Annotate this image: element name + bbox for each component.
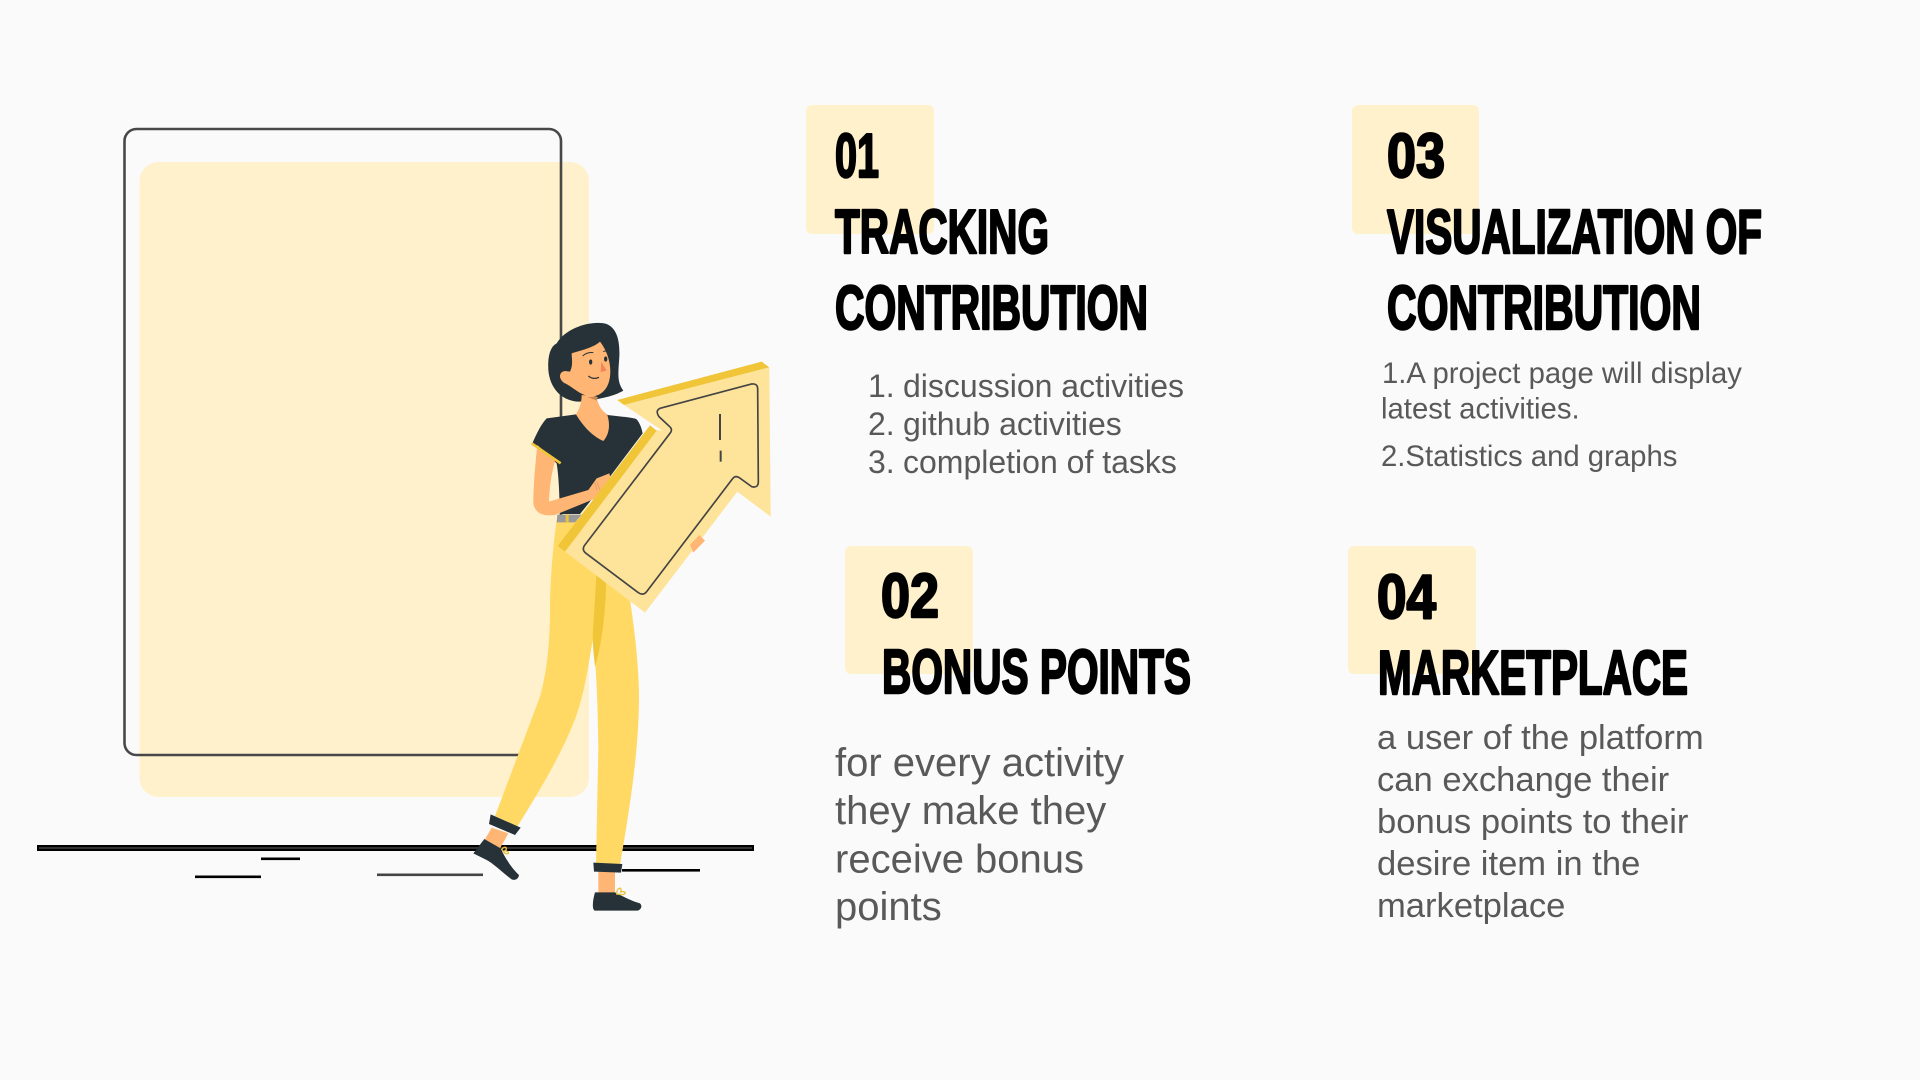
body text 02: they make they — [835, 789, 1106, 833]
number 01: 01 — [835, 122, 879, 191]
section 04: marketplace — [1348, 546, 1704, 925]
panel: pale yellow board — [140, 162, 589, 797]
section 02: bonus points — [835, 546, 1191, 929]
body text 03: 1.A project page will display — [1382, 357, 1742, 390]
list: tracked activities: 2. — [868, 406, 895, 442]
body text 02: receive bonus — [835, 838, 1084, 882]
belt buckle — [566, 514, 569, 523]
body text 04: a user of the platform — [1377, 719, 1704, 757]
shirt — [533, 414, 643, 514]
heading 04: MARKETPLACE — [1378, 639, 1688, 708]
arrow dark left edge — [558, 425, 657, 552]
body text 02 — [835, 741, 1124, 929]
body text 03: latest activities. — [1381, 392, 1580, 426]
left ankle — [485, 828, 508, 848]
body text 02: for every activity — [835, 741, 1124, 785]
panel: outlined frame — [124, 129, 561, 755]
list: tracked activities — [868, 368, 1184, 480]
heading 01: CONTRIBUTION — [835, 274, 1148, 343]
body text 04: marketplace — [1377, 887, 1565, 925]
number tile 03 — [1352, 105, 1479, 234]
arrow dark top edge — [617, 362, 769, 405]
section 03: visualization of contribution — [1352, 105, 1762, 473]
trouser crease — [593, 560, 607, 667]
heading 01: TRACKING — [835, 198, 1049, 267]
right lace — [617, 888, 625, 895]
section 01: tracking contribution — [806, 105, 1184, 480]
body text 04: bonus points to their — [1377, 803, 1688, 841]
body text 02: points — [835, 885, 942, 929]
list: tracked activities: github activities — [903, 406, 1122, 442]
heading 03 — [1387, 198, 1762, 343]
left shoe — [473, 839, 519, 880]
list: tracked activities: 3. — [868, 444, 895, 480]
body text 04 — [1377, 719, 1704, 925]
ground line — [37, 845, 754, 878]
list: tracked activities: 1. — [868, 368, 895, 404]
body text 03: 2.Statistics and graphs — [1381, 440, 1677, 473]
neck shadow — [588, 397, 598, 401]
heading 01 — [835, 198, 1148, 343]
eyes, brows, nose, smile — [583, 351, 608, 378]
face — [560, 342, 610, 397]
arrow dash marks — [717, 414, 724, 462]
arrow inner outline — [583, 384, 758, 594]
number 02: 02 — [881, 562, 939, 631]
list: tracked activities: discussion activities — [903, 368, 1184, 404]
hand under arrow — [690, 535, 705, 553]
number 04: 04 — [1377, 563, 1436, 632]
finger lines — [595, 482, 600, 491]
sleeve trim — [532, 443, 561, 463]
list: tracked activities: completion of tasks — [903, 444, 1177, 480]
right cuff — [593, 863, 622, 873]
number 03: 03 — [1387, 122, 1445, 191]
number tile 04 — [1348, 546, 1476, 674]
figure: upper body and arrow — [532, 323, 771, 613]
right ankle — [598, 872, 615, 893]
left cuff — [489, 814, 521, 835]
number tile 02 — [845, 546, 973, 674]
belt — [557, 515, 582, 522]
heading 02: BONUS POINTS — [882, 638, 1191, 707]
right shoe — [593, 892, 641, 911]
left lace — [502, 847, 509, 854]
arm and hand — [533, 445, 612, 515]
body text 03 — [1381, 357, 1742, 473]
illustration: person carrying an arrow in front of a board — [37, 129, 771, 911]
trousers — [495, 520, 639, 865]
number tile 01 — [806, 105, 934, 234]
hair — [548, 323, 623, 402]
arrow body — [565, 367, 771, 613]
figure: legs and shoes — [473, 520, 641, 911]
body text 04: desire item in the — [1377, 845, 1640, 883]
body text 04: can exchange their — [1377, 761, 1669, 799]
neck — [576, 395, 610, 442]
heading 03: CONTRIBUTION — [1387, 274, 1701, 343]
